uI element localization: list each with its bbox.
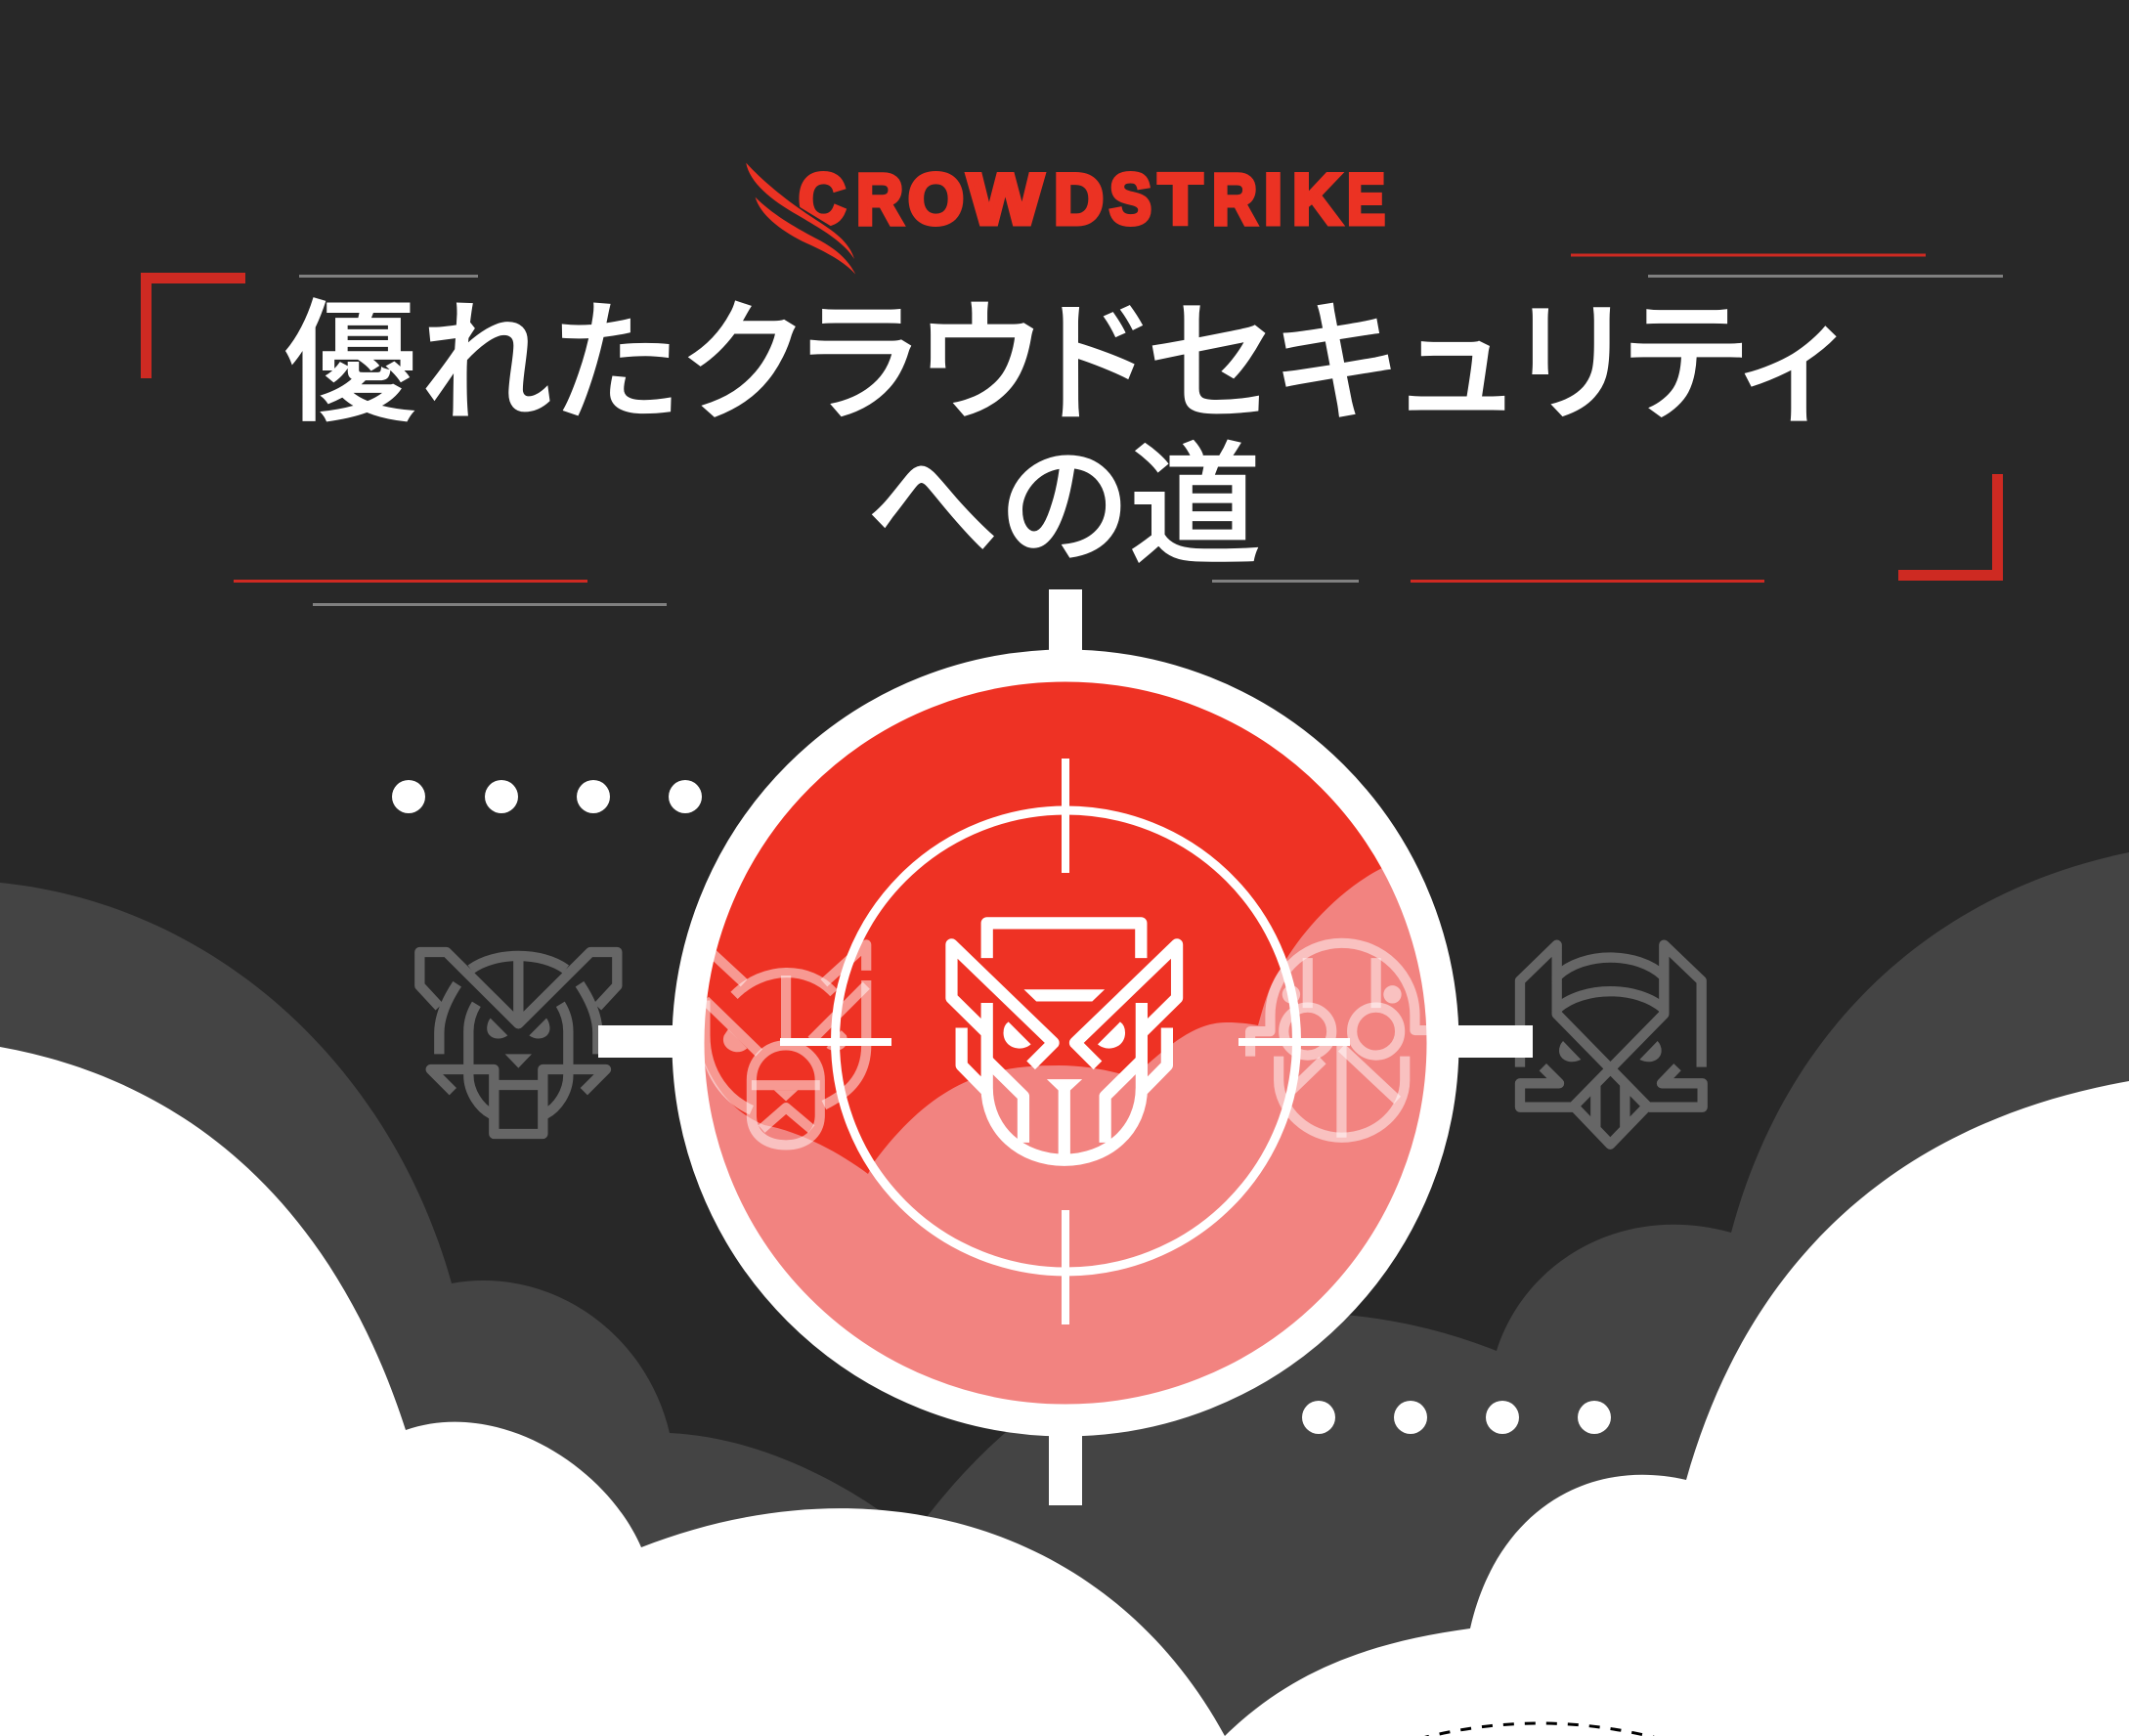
logo: CrowdStrike: O (908, 160, 964, 239)
title bracket: top left (141, 273, 245, 378)
logo: CrowdStrike: I (1264, 160, 1282, 239)
logo: CrowdStrike: K (1292, 160, 1341, 239)
title (284, 289, 1843, 581)
logo: CrowdStrike: R (1212, 160, 1257, 239)
title: 優れたクラウドセキュリティ (284, 289, 1843, 438)
white cloud layer (0, 1047, 2129, 1736)
icon: faded adversary left (705, 944, 866, 1145)
logo: CrowdStrike: R (856, 160, 903, 239)
dashed arc (1398, 1723, 1681, 1736)
logo: CrowdStrike: E (1347, 160, 1385, 239)
target disc: red (702, 679, 1429, 1407)
dots: lower right (1302, 1401, 1611, 1434)
title: への道 (865, 432, 1262, 581)
target disc: pink wave (705, 868, 1427, 1404)
logo: CrowdStrike: S (1109, 160, 1151, 239)
logo: CrowdStrike: C (799, 160, 846, 239)
target ticks (598, 589, 1533, 1505)
icon: faded adversary right (1250, 943, 1432, 1138)
target ring (688, 666, 1443, 1420)
logo: CrowdStrike: T (1158, 160, 1202, 239)
logo: CrowdStrike: D (1054, 160, 1104, 239)
dots: upper left (392, 780, 702, 813)
logo: CrowdStrike (746, 160, 1385, 275)
logo: CrowdStrike: W (968, 160, 1043, 239)
icon: grey adversary mask left (419, 952, 617, 1134)
dark grey cloud layer (0, 852, 2129, 1736)
title bracket: bottom right (1898, 474, 2003, 581)
accent rules (234, 254, 2003, 606)
icon: grey adversary mask right (1520, 945, 1703, 1145)
reticle (780, 759, 1350, 1324)
icon: central adversary mask (951, 923, 1177, 1160)
